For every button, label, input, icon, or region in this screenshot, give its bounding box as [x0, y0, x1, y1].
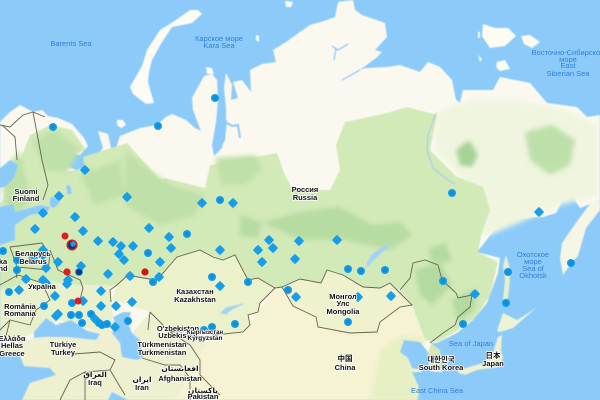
- country labels: 中国: [338, 353, 352, 363]
- country labels: Kazakhstan: [174, 295, 216, 304]
- country labels: [0, 185, 504, 400]
- Yakutia east forest: [525, 125, 575, 175]
- New Siberian Islands: [478, 24, 540, 71]
- border: Russia–Kazakhstan: [110, 250, 282, 302]
- country labels: Iraq: [88, 378, 102, 387]
- country labels: 대한민국: [427, 354, 455, 364]
- Honshu: [455, 335, 503, 383]
- Yakutia dark patches: [456, 140, 478, 167]
- Central Asia and Middle East: [0, 312, 205, 400]
- Ukraine and southern Russia steppe: [0, 280, 113, 340]
- country labels: Türkiye: [50, 340, 76, 349]
- Kamchatka: [560, 200, 600, 275]
- Lake Balkhash: [221, 304, 243, 314]
- border: Russia–Ukraine: [50, 250, 83, 300]
- Korea peninsula: [428, 343, 442, 370]
- sea labels: Карское море: [195, 34, 243, 43]
- country labels: Кыргызстан: [187, 330, 223, 336]
- Baltic Sea: [0, 204, 50, 245]
- border: eastern Europe and Balkans: [0, 268, 50, 340]
- Lena river: [427, 113, 455, 184]
- red markers: [62, 232, 149, 304]
- country labels: Mongolia: [327, 307, 360, 316]
- sea labels: море: [559, 55, 577, 64]
- country labels: Romania: [4, 309, 37, 318]
- country labels: Greece: [0, 349, 25, 358]
- country labels: پاکستان: [188, 386, 218, 395]
- country labels: Україна: [28, 282, 57, 291]
- China desert: [170, 287, 425, 400]
- Lakes Ladoga and Onega: [50, 185, 72, 208]
- country labels: Kyrgyzstan: [187, 335, 223, 342]
- Russian plain green: [0, 107, 498, 342]
- Sea south of Korea: [412, 372, 470, 398]
- country labels: Japan: [482, 359, 504, 368]
- country labels: South Korea: [419, 363, 464, 372]
- Forest patches west: [0, 130, 262, 225]
- Novaya Zemlya: [130, 10, 202, 104]
- country labels: 日本: [486, 350, 501, 360]
- Caspian Sea: [112, 312, 143, 360]
- country labels: Беларусь: [15, 249, 51, 258]
- country labels: România: [4, 302, 37, 311]
- border: Belarus: [10, 243, 50, 270]
- country labels: ایران: [132, 375, 152, 384]
- border: Russia–China far east: [400, 260, 472, 343]
- Sakhalin: [503, 255, 510, 300]
- country labels: افغانستان: [161, 364, 199, 373]
- country labels: Türkmenistan: [137, 340, 187, 349]
- Small arctic islands: [117, 1, 293, 128]
- Eastern China plain: [370, 335, 425, 400]
- sea labels: Barents Sea: [50, 39, 92, 48]
- country labels: Hellas: [1, 341, 23, 350]
- Ob and Yenisei inlets: [216, 120, 240, 153]
- country labels: Uzbekistan: [158, 331, 198, 340]
- border: Turkey and the Middle East: [60, 352, 125, 400]
- Yellow Sea: [400, 340, 428, 372]
- sea labels: море: [524, 257, 542, 266]
- Taymyr inlets: [332, 44, 360, 80]
- Hokkaido: [497, 308, 536, 332]
- Lake Baikal: [367, 244, 390, 266]
- Kazakhstan steppe: [112, 250, 275, 335]
- markers: Far East: [439, 189, 575, 328]
- country labels: Suomi: [15, 187, 37, 196]
- Mediterranean Sea: [0, 356, 56, 400]
- Forest patches central Siberia: [240, 207, 412, 250]
- country labels: Belarus: [19, 257, 47, 266]
- country labels: Iran: [135, 383, 149, 392]
- sea labels: Siberian Sea: [547, 69, 590, 78]
- country labels: Turkmenistan: [138, 348, 187, 357]
- country labels: Монгол: [329, 292, 357, 301]
- country labels: العراق: [83, 370, 107, 379]
- markers: Siberia and Kazakhstan: [200, 235, 396, 334]
- border: Mongolia: [282, 270, 412, 333]
- station markers: [0, 94, 575, 334]
- country labels: Улс: [336, 299, 350, 308]
- Mongolia: [282, 270, 412, 333]
- markers: north Russia: [49, 94, 238, 208]
- country labels: Afghanistan: [158, 374, 202, 383]
- border: Finland-Russia and Norway: [0, 112, 48, 200]
- sea labels: Sea of Japan: [449, 339, 493, 348]
- national borders: [0, 112, 472, 400]
- country labels: Казахстан: [176, 287, 214, 296]
- sea labels: Okhotsk: [519, 271, 547, 280]
- country labels: China: [335, 363, 356, 372]
- country labels: O'zbekiston: [157, 324, 200, 333]
- border: Kazakhstan south and China: [148, 288, 275, 395]
- sea labels: East China Sea: [411, 386, 464, 395]
- Forest patches Far East: [415, 242, 476, 323]
- markers: western Russia: [0, 208, 191, 332]
- country labels: Россия: [292, 185, 318, 194]
- Eastern Siberia mottled tint: [435, 100, 598, 235]
- country labels: Russia: [293, 193, 318, 202]
- Black Sea: [34, 318, 100, 340]
- country labels: Turkey: [51, 348, 76, 357]
- country labels: Finland: [13, 194, 40, 203]
- Gulf of Bothnia: [0, 160, 18, 188]
- border: Iran and Turkmenistan: [142, 358, 190, 400]
- sea labels: Охотское: [517, 250, 549, 259]
- sea labels: Sea of: [522, 264, 545, 273]
- sea labels: Kara Sea: [203, 41, 235, 50]
- Persian Gulf: [108, 392, 128, 400]
- sea labels: East: [560, 61, 576, 70]
